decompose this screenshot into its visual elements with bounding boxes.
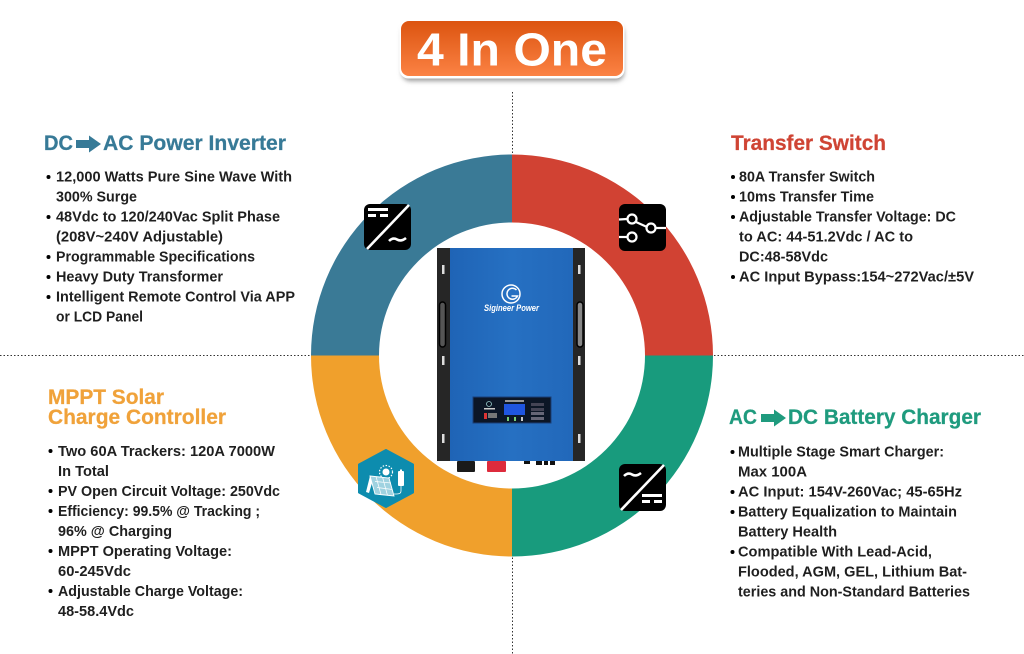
panel: transfer switch	[731, 131, 974, 286]
bullet list: 48-58.4Vdc	[58, 603, 134, 620]
bullet list: Battery Health	[738, 524, 837, 540]
heading	[48, 385, 227, 429]
bullet list	[730, 444, 970, 600]
icon: DC to AC	[364, 204, 411, 250]
bullet list: In Total	[58, 463, 109, 480]
center white disc	[311, 154, 713, 556]
bullet list: (208V~240V Adjustable)	[56, 228, 223, 246]
mounting rails	[437, 248, 585, 461]
heading: Charge Controller	[48, 405, 227, 429]
bullet list: 10ms Transfer Time	[739, 188, 874, 206]
rail bolts	[442, 265, 580, 443]
black terminal	[457, 461, 475, 472]
panel: AC to DC battery charger	[729, 405, 982, 600]
bullet list: Intelligent Remote Control Via APP	[56, 288, 295, 306]
bullet list: Two 60A Trackers: 120A 7000W	[58, 443, 276, 460]
bullet list: 12,000 Watts Pure Sine Wave With	[56, 168, 292, 186]
bullet list: Adjustable Transfer Voltage: DC	[739, 208, 956, 226]
heading: AC Power Inverter	[103, 131, 287, 155]
right handle slot	[577, 302, 583, 347]
bullet list	[46, 168, 295, 326]
panel: DC to AC power inverter	[44, 131, 295, 326]
bullet list: to AC: 44-51.2Vdc / AC to	[739, 228, 913, 246]
bullet list: or LCD Panel	[56, 308, 143, 326]
blue front cover	[450, 248, 573, 461]
ring segment: transfer switch	[512, 154, 713, 356]
bullet list: Multiple Stage Smart Charger:	[738, 444, 944, 460]
bullet list	[731, 168, 974, 286]
bullet list: 60-245Vdc	[58, 563, 131, 580]
brand name: Sigineer Power	[484, 303, 540, 314]
bullet list: Efficiency: 99.5% @ Tracking ;	[58, 503, 260, 520]
heading: AC	[729, 405, 757, 429]
panel: MPPT solar charge controller	[48, 385, 280, 620]
bullet list: Adjustable Charge Voltage:	[58, 583, 243, 600]
control panel	[473, 397, 551, 423]
bullet list: Heavy Duty Transformer	[56, 268, 223, 286]
inverter product	[437, 248, 585, 472]
heading: MPPT Solar	[48, 385, 165, 409]
bullet list: 80A Transfer Switch	[739, 168, 875, 186]
icon: AC to DC	[619, 464, 666, 511]
bullet list: Compatible With Lead-Acid,	[738, 544, 932, 560]
title badge	[400, 20, 624, 81]
icon: solar panel and battery	[359, 450, 413, 507]
left handle slot	[440, 302, 446, 347]
bullet list: MPPT Operating Voltage:	[58, 543, 232, 560]
small connectors	[524, 461, 555, 465]
bullet list: AC Input Bypass:154~272Vac/±5V	[739, 268, 974, 286]
ring segment: battery charger	[512, 356, 713, 556]
heading: DC	[44, 131, 73, 155]
bullet list: teries and Non-Standard Batteries	[738, 584, 970, 600]
bullet list	[48, 443, 280, 620]
bullet list: PV Open Circuit Voltage: 250Vdc	[58, 483, 280, 500]
heading: DC Battery Charger	[788, 405, 982, 429]
ring diagram	[311, 154, 713, 556]
bullet list: DC:48-58Vdc	[739, 248, 828, 266]
heading: Transfer Switch	[731, 131, 886, 155]
bullet list: Max 100A	[738, 464, 807, 480]
red terminal	[487, 461, 506, 472]
bullet list: 96% @ Charging	[58, 523, 172, 540]
bullet list: Programmable Specifications	[56, 248, 255, 266]
bullet list: 48Vdc to 120/240Vac Split Phase	[56, 208, 280, 226]
bullet list: 300% Surge	[56, 188, 137, 206]
title badge: 4 In One	[417, 24, 607, 76]
icon: transfer switch	[619, 204, 666, 251]
brand logo	[502, 285, 520, 303]
ring segment: solar controller	[311, 356, 512, 556]
bullet list: Battery Equalization to Maintain	[738, 504, 957, 520]
ring segment: inverter	[311, 154, 512, 356]
bullet list: Flooded, AGM, GEL, Lithium Bat-	[738, 564, 967, 580]
bullet list: AC Input: 154V-260Vac; 45-65Hz	[738, 484, 962, 500]
